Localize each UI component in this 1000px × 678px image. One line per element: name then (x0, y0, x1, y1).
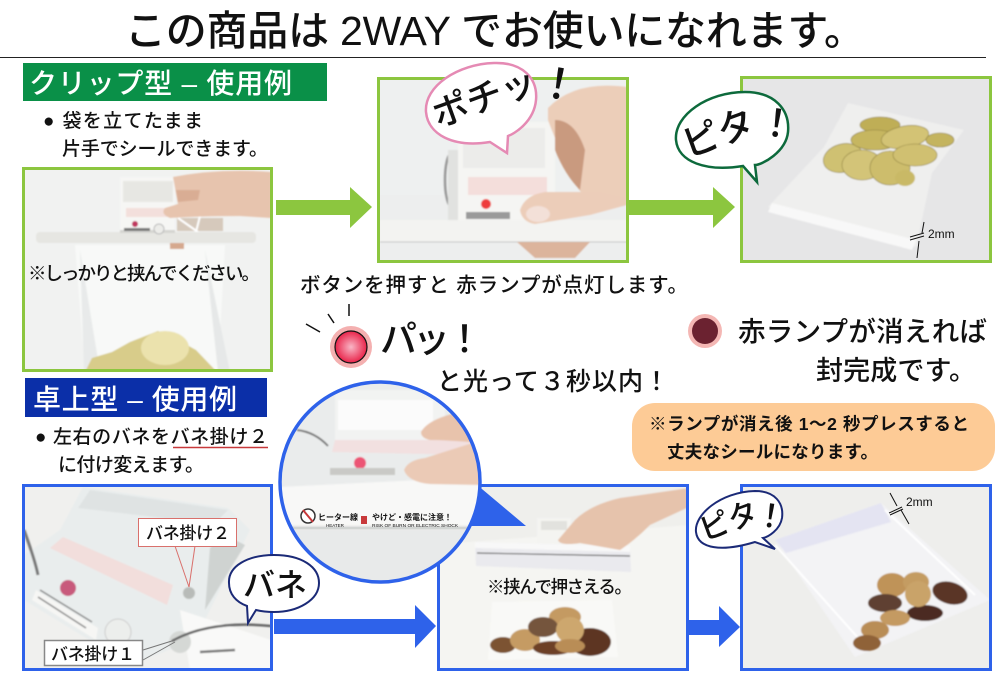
callout: press note: 丈夫なシールになります。 (667, 442, 878, 462)
annotation: 2mm (910, 222, 955, 258)
label: spring hook 1 (44, 640, 175, 666)
icon: magnifier close-up (280, 381, 482, 590)
text: clip type description (43, 110, 268, 160)
text: clip type description: 片手でシールできます。 (62, 138, 268, 160)
text: seal complete: 封完成です。 (816, 356, 976, 386)
text: seal complete (738, 316, 987, 386)
panel: clip photo 2 (377, 77, 629, 263)
label: spring hook 2 (138, 518, 236, 587)
arrow: green 2 (629, 187, 735, 228)
panel: clip result photo (740, 76, 992, 263)
callout: pita blue (695, 491, 789, 549)
icon: heater warning (301, 509, 367, 524)
text: warning label (320, 512, 458, 527)
pointer: magnifier wedge (462, 484, 526, 526)
text: seal complete: 赤ランプが消えれば (738, 316, 987, 347)
text: clip type description: ● 袋を立てたまま (43, 110, 203, 132)
callout: pita green (676, 92, 798, 182)
arrow: blue 1 (274, 605, 436, 648)
callout: pita blue: ピタ (695, 496, 763, 548)
text: desktop description: ● 左右のバネをバネ掛け２ (35, 426, 268, 448)
text: flash: パッ！ (380, 319, 483, 360)
arrow: blue 2 (688, 606, 740, 647)
label: spring hook 1: バネ掛け１ (51, 645, 135, 664)
text: desktop description (35, 426, 268, 476)
callout: pochi: ポチッ (427, 60, 542, 136)
callout: pochi: ！ (533, 58, 583, 111)
heading: desktop type (25, 378, 267, 417)
annotation: 2mm: 2mm (928, 227, 955, 241)
callout: pita green: ！ (755, 101, 798, 148)
panel: spring close-up photo (22, 484, 273, 671)
text: warning label: ヒーター線 (318, 512, 358, 522)
callout: spring (229, 555, 319, 623)
callout: pita green: ピタ (677, 102, 760, 166)
callout: spring: バネ (243, 567, 307, 603)
panel: desktop result photo (740, 484, 992, 671)
text: warning label: RISK OF BURN OR ELECTRIC SHOCK (372, 523, 459, 529)
icon: lit lamp (306, 304, 372, 368)
label: spring hook 2: バネ掛け２ (146, 524, 230, 543)
text: clip instruction: ※しっかりと挟んでください。 (28, 263, 260, 284)
callout: press note (632, 403, 995, 471)
text: desktop description: に付け変えます。 (58, 454, 204, 476)
annotation: 2mm top: 2mm (906, 495, 933, 509)
text: press instruction: ※挟んで押さえる。 (487, 577, 632, 597)
title: この商品は 2WAY でお使いになれます。 (125, 8, 865, 54)
arrow: green 1 (276, 187, 372, 228)
icon: dark lamp (688, 314, 722, 348)
text: lamp lights: ボタンを押すと 赤ランプが点灯します。 (300, 274, 688, 297)
heading: desktop type: 卓上型 – 使用例 (33, 384, 237, 415)
text: warning label: HEATER (326, 523, 345, 528)
callout: pochi (426, 58, 583, 153)
callout: pita blue: ！ (752, 496, 789, 536)
callout: press note: ※ランプが消え後 1～2 秒プレスすると (649, 414, 969, 434)
annotation: 2mm top (889, 493, 933, 524)
text: within 3 seconds: と光って３秒以内！ (437, 368, 669, 396)
panel: clip photo 1 (22, 167, 273, 372)
heading: clip type: クリップ型 – 使用例 (29, 68, 292, 99)
panel: desktop photo (430, 484, 690, 671)
text: warning label: やけど・感電に注意！ (372, 512, 452, 522)
